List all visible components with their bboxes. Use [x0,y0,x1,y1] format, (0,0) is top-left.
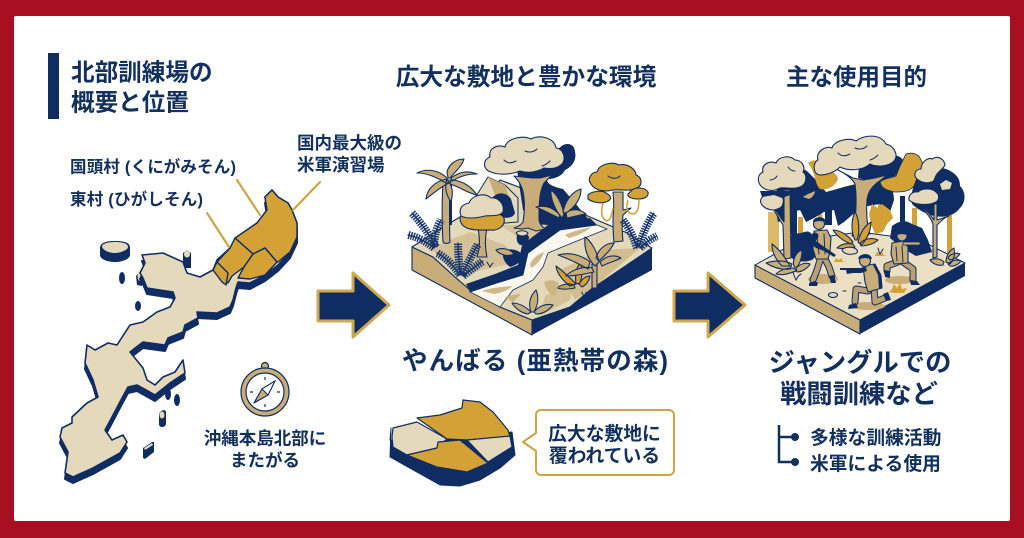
island shadow [60,196,297,483]
heading: main purpose: 主な使用目的 [786,64,927,90]
heading: combat training in the jungle: ジャングルでの [769,348,951,378]
heading: Yanbaru subtropical forest: やんばる (亜熱帯の森) [402,348,668,376]
heading: overview and location [48,53,213,119]
centre small plants [487,231,586,314]
caption: spans northern Okinawa: またがる [230,450,300,470]
heading: overview and location: 概要と位置 [71,90,189,116]
island land [60,190,297,477]
base [755,232,965,334]
gold region: south east [238,248,277,279]
gold region: Higashi [215,238,253,283]
gold region: small [213,262,228,285]
list: training activities: 多様な訓練活動 [810,427,941,448]
icon: compass [241,362,289,416]
gold tree [588,163,648,242]
soldier: kneeling centre [840,254,891,310]
left palm bush [766,244,810,275]
illustration: jungle training diorama [755,136,965,334]
heading: combat training in the jungle: 戦闘訓練など [780,379,938,409]
callout lines [207,180,320,247]
tan highlight on foliage [803,191,815,199]
terrain base [412,180,652,335]
heading: overview and location: 北部訓練場の [71,60,213,86]
soldier: kneeling right [884,230,920,285]
caption: spans northern Okinawa [204,428,326,470]
tan ground patches [430,215,640,316]
river [466,218,607,307]
callout: covered by a vast site [523,410,674,475]
small islands [100,241,191,459]
callout: covered by a vast site: 広大な敷地に [548,422,661,444]
central tree [814,136,896,236]
central fern [833,212,878,249]
arrow: second [674,273,745,337]
small beige tree [460,195,504,257]
heading: vast site: 広大な敷地と豊かな環境 [396,63,657,91]
small terrain map [390,400,515,486]
left tree [758,157,806,259]
back gold trunks [768,193,952,253]
label: Higashi village: 東村 (ひがしそん) [70,189,203,209]
arrow: first [318,273,389,337]
map: Okinawa main island [60,190,297,483]
list: training activities: 米軍による使用 [810,453,941,474]
right tree [909,157,964,258]
list: training activities [779,425,941,474]
right palm bush [930,248,961,266]
ground details [793,248,907,298]
mountain [463,177,518,225]
navy forest canopy [774,153,932,262]
gold foliage [808,153,924,234]
big tree [484,137,564,231]
soldier: standing [808,217,838,286]
navy bushes [786,231,820,262]
palm tree [417,159,477,244]
navy forest behind big tree [493,144,589,225]
ferns [408,213,657,276]
label: largest US military training area [297,133,402,175]
label: largest US military training area: 国内最大級の [297,133,402,153]
gold region: Kunigami [235,190,297,262]
callout: covered by a vast site: 覆われている [549,445,660,466]
illustration: subtropical forest diorama [408,137,657,335]
right palm cluster [556,237,621,289]
caption: spans northern Okinawa: 沖縄本島北部に [204,428,326,448]
heading: combat training in the jungle [769,348,951,409]
label: largest US military training area: 米軍演習場 [297,155,384,175]
label: Kunigami village: 国頭村 (くにがみそん) [70,156,236,176]
right back palm [536,189,586,218]
rock [842,247,857,254]
